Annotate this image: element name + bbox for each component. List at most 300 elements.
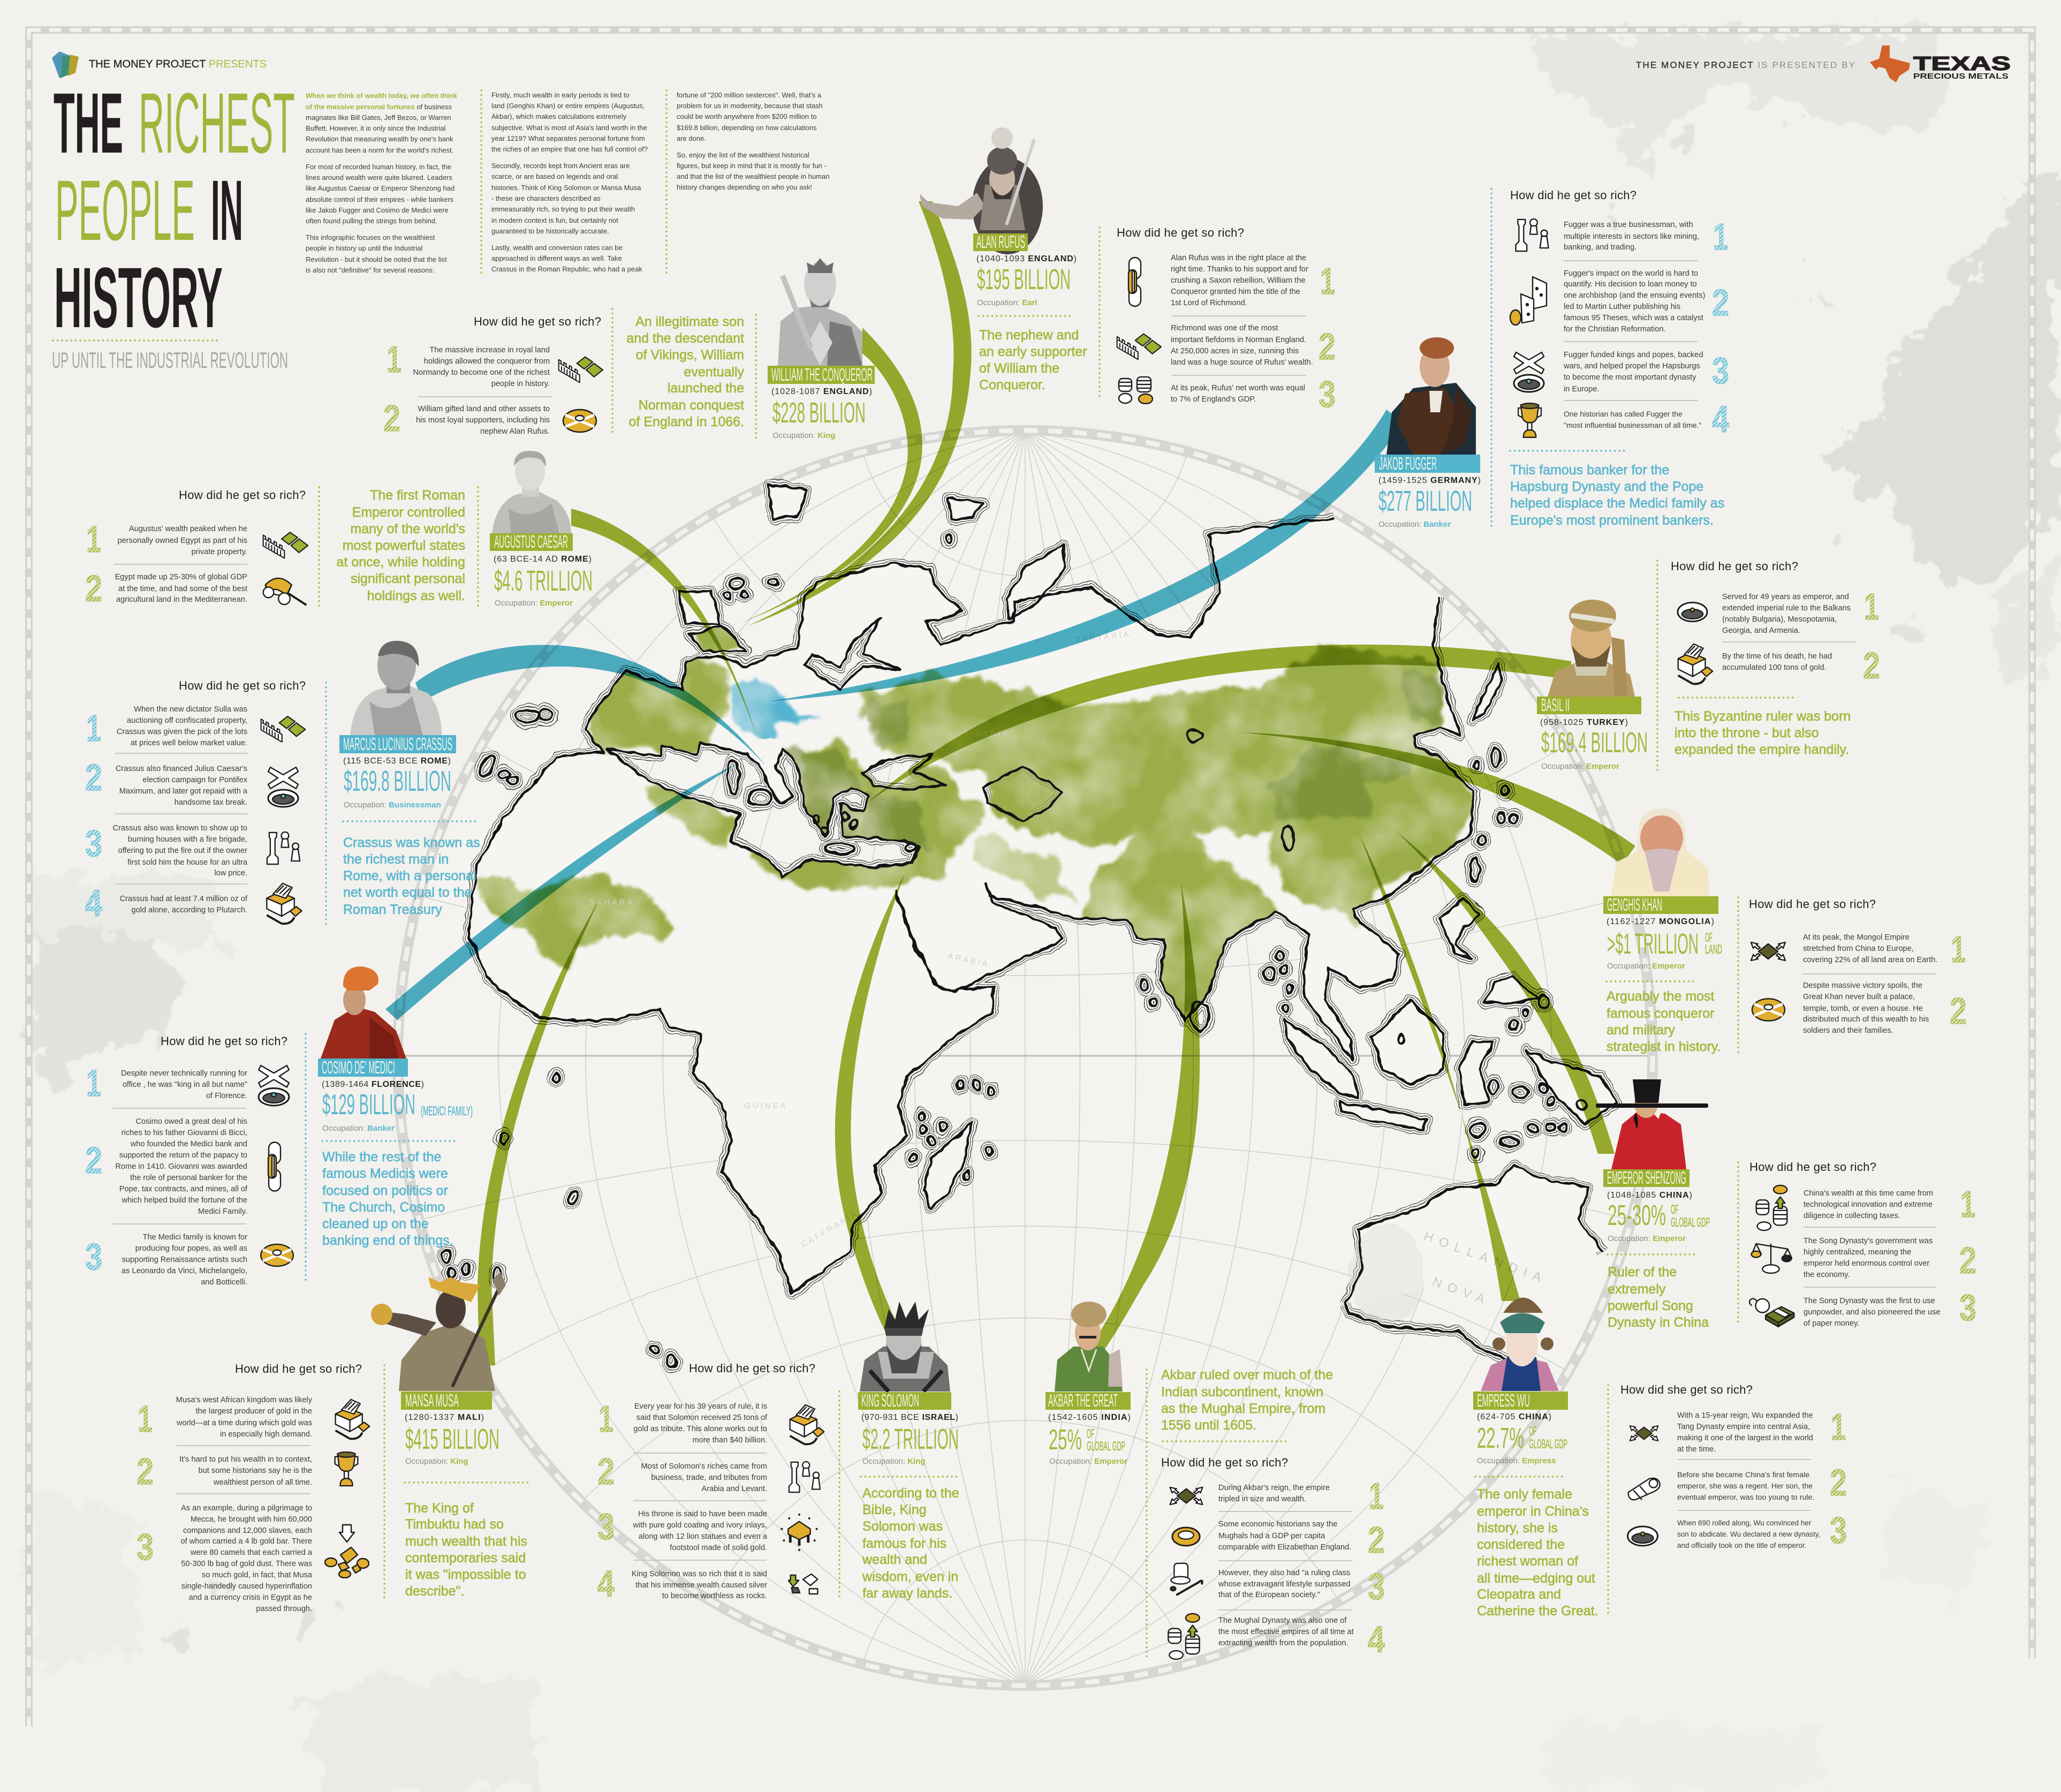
faint old map place names: TARTARIA	[1075, 630, 1132, 645]
portrait: William	[778, 258, 862, 366]
occupation: Occupation: Emperor	[1541, 762, 1619, 771]
item 2: Egypt made up 25-30% of global GDP	[115, 573, 247, 581]
item 2: quantify. His decision to loan money to	[1564, 280, 1697, 289]
callout: of Vikings, William	[636, 347, 744, 362]
item 1: Crassus was given the pick of the lots	[117, 728, 247, 736]
faint old map place names: CAFFRARIA	[800, 1209, 860, 1249]
item 1: (notably Bulgaria), Mesopotamia,	[1722, 615, 1837, 624]
item 1: tripled in size and wealth.	[1218, 1495, 1306, 1503]
dates: (624-705 CHINA)	[1477, 1412, 1551, 1421]
item 3: However, they also had "a ruling class	[1218, 1569, 1350, 1577]
portrait: Empress Wu	[1481, 1298, 1559, 1391]
item 4: 4	[1712, 398, 1729, 440]
intro column 2: subjective. What is most of Asia's land worth in the	[491, 124, 647, 132]
callout: An illegitimate son	[635, 314, 744, 329]
portrait: Augustus	[492, 451, 571, 533]
intro column 1: is also not "definitive" for several reasons:	[306, 266, 434, 274]
item 3	[85, 1233, 293, 1287]
item 3: offering to put the fire out if the owner	[118, 846, 247, 855]
panel: Jakob Fugger	[1375, 188, 1729, 529]
item 3: 50-300 lb bag of gold dust. There was	[181, 1560, 312, 1568]
intro column 2: scarce, or are based on legends and oral	[491, 172, 618, 180]
intro column 2: Akbar), which makes calculations extremely	[491, 112, 627, 120]
item 2: Richmond was one of the most	[1171, 324, 1278, 332]
item 1: extended imperial rule to the Balkans	[1722, 604, 1851, 613]
heading: How did he get so rich?	[1117, 226, 1244, 239]
item 2: 2	[383, 397, 400, 439]
intro column 1: Revolution that measuring wealth by one's bank	[306, 135, 453, 143]
item 2: William gifted land and other assets to	[418, 405, 550, 413]
ribbon: William the Conqueror	[739, 328, 922, 624]
name label: EMPRESS WU	[1477, 1390, 1530, 1410]
callout: The nephew and	[979, 328, 1079, 343]
callout: wealth and	[862, 1552, 927, 1567]
intro column 1: like Jakob Fugger and Cosimo de Medici were	[306, 206, 449, 214]
heading: How did he get so rich?	[689, 1362, 815, 1375]
item 2: riches to his father Giovanni di Bicci,	[122, 1129, 247, 1137]
item 3: so much gold, in fact, that Musa	[202, 1571, 313, 1579]
item 1: holdings allowed the conqueror from	[424, 357, 550, 366]
wealth value: 22.7%	[1477, 1422, 1524, 1454]
item 2: Rome in 1410. Giovanni was awarded	[115, 1162, 247, 1171]
item 1: 1	[138, 1398, 153, 1440]
occupation: Occupation: Emperor	[1049, 1457, 1127, 1466]
item 2	[85, 1117, 281, 1216]
panel: Marcus Licinius Crassus	[85, 641, 480, 925]
item 2: By the time of his death, he had	[1722, 652, 1832, 661]
title: IN	[211, 162, 243, 258]
item 2: supported the return of the papacy to	[119, 1151, 247, 1160]
item 2: emperor, she was a regent. Her son, the	[1677, 1482, 1813, 1491]
item 1: 1	[1960, 1183, 1975, 1225]
callout: Norman conquest	[639, 398, 744, 413]
item 3: first sold him the house for an ultra	[127, 858, 248, 867]
portrait: Fugger	[1386, 337, 1476, 455]
item 1: 1st Lord of Richmond.	[1171, 299, 1247, 307]
item 4	[1518, 398, 1729, 440]
item 3: in Europe.	[1564, 385, 1600, 394]
item 2	[597, 1450, 820, 1493]
item 2: important fiefdoms in Norman England.	[1171, 336, 1306, 344]
item 1: at the time.	[1677, 1445, 1716, 1454]
item 2: election campaign for Pontifex	[142, 776, 248, 784]
item 4: 4	[1368, 1619, 1385, 1660]
intro column 2: year 1219? What separates personal fortune from	[491, 134, 645, 142]
Australia grey shading	[1349, 1223, 1424, 1325]
panel: Alan Rufus: ALAN RUFUS	[976, 232, 1025, 252]
item 4	[597, 1563, 817, 1605]
item 1: Georgia, and Armenia.	[1722, 626, 1800, 635]
wealth value: (MEDICI FAMILY)	[421, 1104, 473, 1118]
callout: richest woman of	[1477, 1554, 1578, 1569]
portrait: Solomon	[860, 1302, 950, 1392]
item 2: 2	[1830, 1462, 1847, 1503]
connecting ribbons	[385, 201, 1635, 1365]
item 3: of paper money.	[1804, 1319, 1859, 1328]
heading: How did he get so rich?	[1161, 1456, 1288, 1469]
faint old map place names: SIBERIA	[964, 729, 1010, 738]
dates: (115 BCE-53 BCE ROME)	[343, 757, 451, 766]
item 3	[1514, 350, 1729, 394]
panel: Akbar the Great	[1045, 1302, 1385, 1660]
item 1: Musa's west African kingdom was likely	[176, 1396, 313, 1404]
occupation: Occupation: King	[862, 1457, 926, 1466]
item 2: Crassus also financed Julius Caesar's	[116, 765, 247, 773]
map globe	[398, 430, 1653, 1685]
dates: (958-1025 TURKEY)	[1540, 718, 1628, 727]
item 4: 4	[597, 1563, 615, 1605]
sponsor: Texas Precious Metals: THE MONEY PROJECT IS PRESENTED BY	[1636, 60, 1855, 70]
ribbon: Alan Rufus	[747, 201, 972, 626]
portrait: Genghis Khan	[1611, 808, 1709, 896]
item 2: Arabia and Levant.	[701, 1485, 767, 1493]
name label	[339, 734, 456, 754]
intro column 1: of business	[415, 103, 452, 111]
item 4: One historian has called Fugger the	[1564, 410, 1683, 418]
item 4: extracting wealth from the population.	[1218, 1639, 1348, 1647]
item 4: that his immense wealth caused silver	[635, 1581, 767, 1590]
item 1: 1	[598, 1398, 613, 1440]
item 3	[1170, 1563, 1385, 1607]
panel: Akbar the Great: GLOBAL GDP	[1087, 1439, 1125, 1454]
ribbon: Augustus Caesar	[571, 509, 767, 771]
item 2: Most of Solomon's riches came from	[641, 1462, 767, 1471]
intro column 1: like Augustus Caesar or Emperor Shenzong had	[306, 184, 454, 192]
item 2: At 250,000 acres in size, running this	[1171, 347, 1299, 356]
wealth value: $169.8 BILLION	[344, 765, 451, 797]
item 2: at the time, and had some of the best	[118, 585, 247, 593]
callout: as the Mughal Empire, from	[1161, 1401, 1325, 1416]
occupation: Occupation: Businessman	[344, 800, 441, 810]
item 2: highly centralized, meaning the	[1804, 1248, 1911, 1257]
intro column 2: approached in different ways as well. Take	[491, 254, 622, 262]
item 3: Mecca, he brought with him 60,000	[191, 1515, 312, 1524]
item 1: 1	[1369, 1475, 1384, 1517]
callout: Indian subcontinent, known	[1161, 1385, 1323, 1400]
item 2: business, trade, and tributes from	[651, 1473, 767, 1482]
panel: Marcus Licinius Crassus: MARCUS LUCINIUS CRASSUS	[343, 734, 452, 754]
callout: Bible, King	[862, 1502, 927, 1517]
item 3: 3	[1368, 1566, 1385, 1607]
panel: Augustus Caesar	[85, 451, 593, 609]
callout: This famous banker for the	[1510, 463, 1669, 478]
callout: describe".	[405, 1584, 464, 1599]
item 1: covering 22% of all land area on Earth.	[1803, 956, 1938, 964]
intro column 2: land (Genghis Khan) or entire empires (Augustus,	[491, 102, 645, 110]
item 2: eventual emperor, was too young to rule.	[1677, 1493, 1814, 1502]
item 1: office , he was "king in all but name"	[123, 1080, 247, 1089]
item 1: stretched from China to Europe,	[1803, 944, 1914, 953]
ribbon: Jakob Fugger	[769, 410, 1404, 701]
item 3: When 690 rolled along, Wu convinced her	[1677, 1519, 1812, 1527]
item 2: Great Khan never built a palace,	[1803, 993, 1915, 1001]
panel: Emperor Shenzong: EMPEROR SHENZONG	[1607, 1168, 1686, 1188]
ribbon: Empress Wu	[1360, 835, 1520, 1301]
item 3: and a currency crisis in Egypt as he	[189, 1593, 312, 1602]
callout: and the descendant	[626, 331, 744, 346]
occupation: Occupation: Earl	[977, 298, 1037, 307]
item 2: agricultural land in the Mediterranean.	[116, 595, 247, 604]
item 4: Crassus had at least 7.4 million oz of	[120, 895, 248, 903]
item 1: making it one of the largest in the world	[1677, 1434, 1813, 1442]
dashed globe ring	[398, 430, 1653, 1685]
name label	[858, 1390, 951, 1410]
intro column 2: the riches of an empire that one has full control of?	[491, 145, 648, 153]
icon: Texas shape	[1870, 46, 1910, 82]
intro column 1: of the massive personal fortunes	[306, 103, 415, 111]
item 2: Maximum, and later got repaid with a	[119, 787, 248, 796]
item 3: 3	[1712, 350, 1729, 391]
wealth value: $4.6 TRILLION	[494, 565, 593, 597]
item 1	[86, 705, 305, 749]
occupation: Occupation: Emperor	[1608, 1234, 1686, 1243]
item 1: said that Solomon received 25 tons of	[637, 1413, 768, 1422]
intro column 2: immeasurably rich, so trying to put their wealth	[491, 205, 635, 213]
callout: all time—edging out	[1477, 1571, 1595, 1586]
item 1	[86, 518, 308, 560]
callout: Akbar ruled over much of the	[1161, 1367, 1333, 1382]
wealth value: $169.4 BILLION	[1541, 727, 1648, 759]
item 3: 3	[85, 822, 102, 864]
item 3: and officially took on the title of emperor.	[1677, 1541, 1806, 1549]
wealth value: 25%	[1049, 1424, 1082, 1456]
intro column 3: and that the list of the wealthiest people in human	[677, 172, 829, 180]
callout: of England in 1066.	[629, 414, 744, 429]
callout: strategist in history.	[1607, 1039, 1721, 1054]
item 2: 2	[85, 568, 102, 609]
item 3: passed through.	[256, 1605, 312, 1613]
item 2: 2	[597, 1450, 615, 1492]
item 2: handsome tax break.	[175, 798, 247, 807]
item 2	[1628, 1462, 1847, 1503]
item 2	[137, 1450, 358, 1492]
icon: Money Project logo	[52, 51, 79, 78]
ribbon: Emperor Shenzong	[1396, 831, 1615, 1154]
callout: banking end of things.	[322, 1233, 453, 1248]
item 2: comparable with Elizabethan England.	[1218, 1543, 1351, 1552]
item 2: for the Christian Reformation.	[1564, 325, 1666, 334]
item 1: of Florence.	[206, 1092, 247, 1100]
item 1: multiple interests in sectors like mining,	[1564, 232, 1699, 241]
callout: According to the	[862, 1486, 959, 1501]
item 1: Served for 49 years as emperor, and	[1722, 593, 1849, 601]
item 2: famous 95 Theses, which was a catalyst	[1564, 314, 1703, 322]
panel: William the Conqueror	[383, 258, 875, 440]
name label: BASIL II	[1541, 695, 1570, 715]
callout: an early supporter	[979, 344, 1087, 359]
intro column 1: For most of recorded human history, in fact, the	[306, 163, 451, 171]
item 2: 2	[85, 1139, 102, 1181]
callout: at once, while holding	[337, 555, 465, 570]
item 1: 1	[1864, 586, 1879, 627]
intro column 1: lines around wealth were quite blurred. Leaders	[306, 173, 452, 182]
item 1	[138, 1396, 369, 1440]
item 2: 2	[137, 1450, 154, 1492]
item 1: When the new dictator Sulla was	[134, 705, 247, 714]
item 2: but some historians say he is the	[198, 1466, 312, 1475]
intro column 1: often found pulling the strings from behind.	[306, 217, 437, 225]
callout: eventually	[684, 365, 744, 380]
item 2: accumulated 100 tons of gold.	[1722, 663, 1827, 672]
item 1	[1678, 586, 1879, 635]
item 1: diligence in collecting taxes.	[1804, 1212, 1900, 1220]
dates: (1048-1085 CHINA)	[1607, 1191, 1692, 1200]
callout: Arguably the most	[1607, 989, 1715, 1004]
item 1: more than $40 billion.	[692, 1436, 767, 1445]
heading: How did he get so rich?	[1671, 559, 1798, 573]
callout: history, she is	[1477, 1521, 1558, 1536]
callout: Ruler of the	[1608, 1265, 1677, 1280]
intro column 1: absolute control of their empires - while bankers	[306, 195, 454, 203]
name label	[768, 365, 875, 384]
item 2: land was a huge source of Rufus' wealth.	[1171, 358, 1313, 367]
heading: How did she get so rich?	[1620, 1383, 1753, 1396]
item 1: auctioning off confiscated property,	[127, 716, 247, 725]
item 1: 1	[1713, 216, 1728, 258]
item 2: The Song Dynasty's government was	[1804, 1237, 1933, 1245]
callout: Cleopatra and	[1477, 1587, 1561, 1602]
item 2: the economy.	[1804, 1271, 1850, 1279]
item 2	[85, 568, 306, 609]
item 1	[1756, 1183, 1975, 1230]
item 2: Cosimo owed a great deal of his	[136, 1117, 247, 1126]
callout: The first Roman	[370, 488, 465, 503]
dates: (970-931 BCE ISRAEL)	[861, 1413, 958, 1422]
intro column 2: histories. Think of King Solomon or Mansa Musa	[491, 184, 641, 192]
intro column 2: Crassus in the Roman Republic, who had a peak	[491, 265, 642, 273]
title: THE	[54, 75, 123, 171]
title	[54, 75, 295, 345]
dates: (63 BCE-14 AD ROME)	[494, 555, 592, 564]
callout: considered the	[1477, 1537, 1565, 1552]
occupation: Occupation: King	[772, 431, 836, 440]
dates: (1040-1093 ENGLAND)	[976, 254, 1077, 263]
panel: Genghis Khan: LAND	[1705, 942, 1722, 957]
item 1: personally owned Egypt as part of his	[117, 536, 247, 545]
item 2	[1172, 1519, 1385, 1561]
text: RICHEST	[139, 75, 295, 171]
item 3: single-handedly caused hyperinflation	[181, 1582, 312, 1591]
item 1: people in history.	[491, 380, 550, 388]
callout: powerful Song	[1608, 1298, 1693, 1313]
item 3: along with 12 lion statues and even a	[639, 1532, 768, 1541]
item 3: footstool made of solid gold.	[670, 1544, 767, 1552]
callout: Crassus was known as	[343, 835, 480, 850]
item 4: gold alone, according to Plutarch.	[131, 906, 247, 914]
item 4: "most influential businessman of all time."	[1564, 421, 1701, 429]
item 3: At its peak, Rufus' net worth was equal	[1171, 384, 1305, 392]
heading: How did he get so rich?	[1510, 188, 1636, 202]
callout: The King of	[405, 1501, 474, 1516]
item 1: right time. Thanks to his support and for	[1171, 265, 1308, 274]
callout: famous for his	[862, 1536, 946, 1551]
item 1: world—at a time during which gold was	[176, 1419, 312, 1427]
callout: it was "impossible to	[405, 1567, 526, 1582]
item 1: crushing a Saxon rebellion, William the	[1171, 276, 1305, 285]
item 2: Some economic historians say the	[1218, 1520, 1337, 1529]
wealth value: 25-30%	[1608, 1199, 1666, 1231]
name label	[1045, 1390, 1131, 1410]
intro column 3: So, enjoy the list of the wealthiest historical	[677, 151, 809, 159]
item 2: nephew Alan Rufus.	[480, 427, 550, 436]
item 3: son to abdicate. Wu declared a new dynasty,	[1677, 1530, 1820, 1538]
callout: most powerful states	[343, 538, 465, 553]
item 2: Pope, tax contracts, and mines, all of	[119, 1185, 248, 1193]
wealth value	[1607, 928, 1722, 960]
item 2: soldiers and their families.	[1803, 1026, 1893, 1035]
occupation: Occupation: Emperor	[495, 599, 573, 608]
callout: Europe's most prominent bankers.	[1510, 513, 1714, 528]
name label	[490, 532, 573, 551]
item 3: 3	[1830, 1509, 1847, 1551]
item 2: Before she became China's first female	[1677, 1471, 1809, 1479]
item 3: companions and 12,000 slaves, each	[183, 1526, 312, 1535]
item 4	[85, 882, 302, 924]
sponsor wordmark: TEXAS	[1913, 52, 2011, 74]
item 2: led to Martin Luther publishing his	[1564, 303, 1680, 311]
intro text columns	[306, 90, 829, 275]
item 3: 3	[137, 1526, 154, 1568]
callout: and military	[1607, 1023, 1675, 1038]
callout: many of the world's	[350, 521, 465, 536]
intro column 1: people in history up until the Industrial	[306, 244, 422, 252]
item 3: The Song Dynasty was the first to use	[1804, 1297, 1935, 1305]
item 1	[1630, 1406, 1846, 1454]
ribbon: Basil II	[867, 645, 1571, 803]
intro column 1: Buffett. However, it is only since the Industrial	[306, 124, 445, 132]
item 4: the most effective empires of all time at	[1218, 1628, 1354, 1636]
dates: (1028-1087 ENGLAND)	[771, 387, 872, 396]
item 3: 3	[1319, 373, 1336, 415]
item 1	[387, 338, 603, 388]
callout: helped displace the Medici family as	[1510, 496, 1724, 511]
wealth value: $195 BILLION	[977, 263, 1071, 296]
item 3	[1119, 373, 1336, 415]
callout: Roman Treasury	[343, 902, 442, 917]
callout: famous Medicis were	[322, 1166, 448, 1181]
item 3: wars, and helped propel the Hapsburgs	[1563, 362, 1700, 371]
name label	[973, 232, 1028, 252]
item 2: 2	[1319, 326, 1336, 367]
callout: 1556 until 1605.	[1161, 1418, 1256, 1433]
heading: How did he get so rich?	[474, 315, 601, 328]
graticule	[398, 430, 1653, 1685]
faint old map place names: NOVA	[1430, 1274, 1493, 1309]
item 1: at prices well below market value.	[131, 739, 247, 747]
item 1: China's wealth at this time came from	[1804, 1189, 1933, 1198]
intro column 2: guaranteed to be historically accurate.	[491, 227, 609, 235]
portrait: Crassus	[350, 641, 442, 735]
item 3: that of the European society."	[1218, 1591, 1320, 1599]
callout: Dynasty in China	[1608, 1315, 1709, 1330]
intro column 3: could be worth anywhere from $200 million to	[677, 112, 817, 120]
portrait: Cosimo	[321, 966, 406, 1058]
item 1: With a 15-year reign, Wu expanded the	[1677, 1411, 1813, 1420]
item 2: Medici Family.	[198, 1207, 247, 1216]
item 1: At its peak, the Mongol Empire	[1803, 933, 1910, 942]
item 2: which helped build the fortune of the	[122, 1196, 247, 1205]
item 1: in especially high demand.	[220, 1430, 312, 1439]
wealth value: OF	[1087, 1427, 1094, 1441]
heading: How did he get so rich?	[179, 488, 306, 502]
item 1	[1128, 254, 1335, 307]
item 2: Despite massive victory spoils, the	[1803, 981, 1922, 990]
item 2: 2	[1712, 282, 1729, 323]
panel: Empress Wu	[1473, 1298, 1847, 1619]
intro column 1: account has been a norm for the world's richest.	[306, 146, 453, 154]
presents line: THE MONEY PROJECT PRESENTS	[89, 58, 267, 70]
callout: focused on politics or	[322, 1183, 448, 1198]
